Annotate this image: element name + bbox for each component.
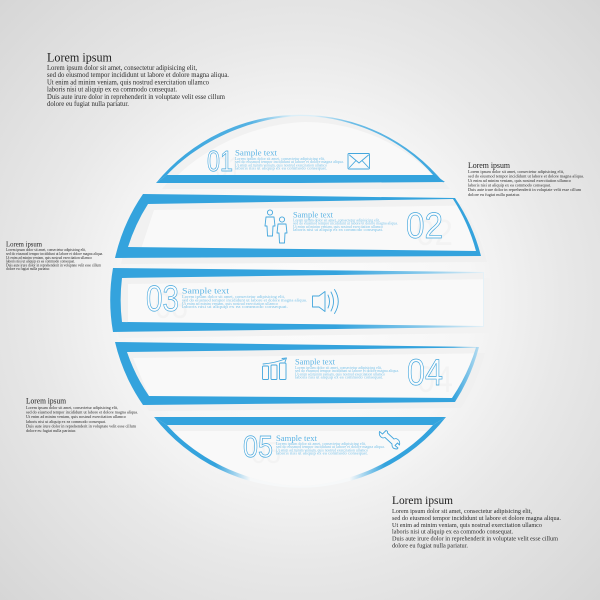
- text block: left middle: sed do eiusmod tempor incididunt ut labore et dolore magna aliqua.: [6, 252, 103, 256]
- text block: top left: [47, 50, 229, 108]
- body text 3: Ut enim ad minim veniam, quis nostrud exercitation ullamco: [182, 302, 278, 307]
- heading: sample text 4: Sample text: [295, 358, 336, 366]
- body text 5: sed do eiusmod tempor incididunt ut labore et dolore magna aliqua.: [276, 445, 385, 449]
- text block: bottom right: Lorem ipsum dolor sit amet, consectetur adipisicing elit,: [392, 508, 532, 515]
- text block: bottom right: Lorem ipsum: [392, 493, 454, 507]
- icon: envelope: [348, 154, 370, 169]
- text block: bottom right: Ut enim ad minim veniam, quis nostrud exercitation ullamco: [392, 522, 542, 529]
- body text 1: Ut enim ad minim veniam, quis nostrud exercitation ullamco: [235, 163, 327, 168]
- body text 4: Ut enim ad minim veniam, quis nostrud exercitation ullamco: [295, 372, 385, 377]
- text block: bottom right: Duis aute irure dolor in reprehenderit in voluptate velit esse cillum: [392, 536, 558, 543]
- icon: people: [265, 210, 287, 243]
- text block: bottom right: [392, 493, 561, 550]
- body text 4: Lorem ipsum dolor sit amet, consectetur adipisicing elit,: [295, 366, 382, 371]
- text block: lower left: Ut enim ad minim veniam, quis nostrud exercitation ullamco: [26, 414, 127, 420]
- text block: right top: laboris nisi ut aliquip ex ea commodo consequat.: [468, 183, 551, 188]
- heading: sample text 3: Sample text: [182, 286, 230, 296]
- text block: lower left: Lorem ipsum dolor sit amet, consectetur adipisicing elit,: [26, 405, 118, 411]
- text block: left middle: [6, 240, 103, 271]
- body text 1: Lorem ipsum dolor sit amet, consectetur adipisicing elit,: [235, 157, 325, 162]
- number 05: 05: [243, 429, 273, 464]
- text block: left middle: Lorem ipsum dolor sit amet, consectetur adipisicing elit,: [6, 248, 86, 253]
- body text 3: [182, 295, 307, 309]
- text block: right top: Duis aute irure dolor in reprehenderit in voluptate velit esse cillum: [468, 187, 581, 192]
- number 01: 01: [207, 146, 233, 178]
- text block: lower left: sed do eiusmod tempor incididunt ut labore et dolore magna aliqua.: [26, 410, 138, 415]
- body text 5: [276, 442, 385, 456]
- text block: bottom right: dolore eu fugiat nulla pariatur.: [392, 542, 468, 550]
- text block: left middle: Lorem ipsum: [6, 240, 42, 248]
- icon: wrench: [379, 430, 400, 449]
- heading: sample text 2: Sample text: [293, 210, 334, 220]
- body text 4: laboris nisi ut aliquip ex ea commodo consequat.: [295, 376, 383, 380]
- text block: left middle: laboris nisi ut aliquip ex ea commodo consequat.: [6, 260, 75, 264]
- text block: left middle: dolore eu fugiat nulla pariatur.: [6, 267, 50, 271]
- text block: right top: [468, 161, 584, 197]
- text block: lower left: [26, 396, 138, 433]
- panel: segment 4: 04: [417, 359, 453, 400]
- text block: left middle: Duis aute irure dolor in reprehenderit in voluptate velit esse cillum: [6, 263, 101, 267]
- text block: right top: Lorem ipsum dolor sit amet, consectetur adipisicing elit,: [468, 169, 564, 175]
- panel: segment 2: 02: [416, 212, 453, 253]
- number 03: 03: [146, 278, 179, 319]
- text block: right top: Ut enim ad minim veniam, quis nostrud exercitation ullamco: [468, 178, 572, 184]
- body text 1: laboris nisi ut aliquip ex ea commodo consequat.: [235, 167, 327, 171]
- body text 2: Lorem ipsum dolor sit amet, consectetur adipisicing elit,: [293, 218, 380, 224]
- panel: segment 3: 03: [155, 285, 188, 326]
- icon: bar chart: [262, 358, 286, 380]
- heading: sample text 1: Sample text: [235, 148, 278, 158]
- text block: lower left: Duis aute irure dolor in reprehenderit in voluptate velit esse cillum: [26, 423, 137, 428]
- icon: speaker: [312, 290, 338, 314]
- panel: segment 5: [154, 417, 446, 480]
- text block: top left: dolore eu fugiat nulla pariatur.: [47, 101, 129, 108]
- text block: lower left: laboris nisi ut aliquip ex ea commodo consequat.: [26, 419, 106, 424]
- body text 2: [293, 218, 398, 232]
- panel: segment 1: [156, 115, 450, 190]
- text block: bottom right: laboris nisi ut aliquip ex ea commodo consequat.: [392, 529, 513, 536]
- text block: top left: Duis aute irure dolor in reprehenderit in voluptate velit esse cillum: [47, 94, 226, 101]
- text block: right top: dolore eu fugiat nulla pariatur.: [468, 192, 520, 197]
- text block: top left: Lorem ipsum dolor sit amet, consectetur adipisicing elit,: [47, 65, 197, 72]
- text block: top left: laboris nisi ut aliquip ex ea commodo consequat.: [47, 87, 177, 94]
- body text 5: laboris nisi ut aliquip ex ea commodo consequat.: [276, 452, 368, 456]
- text block: top left: sed do eiusmod tempor incididunt ut labore et dolore magna aliqua.: [47, 72, 229, 79]
- body text 1: sed do eiusmod tempor incididunt ut labore et dolore magna aliqua.: [235, 160, 344, 164]
- text block: bottom right: sed do eiusmod tempor incididunt ut labore et dolore magna aliqua.: [392, 515, 561, 522]
- body text 1: [235, 157, 344, 171]
- panel: segment 5: 05: [251, 435, 281, 470]
- text block: lower left: Lorem ipsum: [26, 396, 67, 406]
- body text 4: sed do eiusmod tempor incididunt ut labore et dolore magna aliqua.: [295, 369, 399, 373]
- text block: top left: Lorem ipsum: [47, 50, 112, 64]
- number 04: 04: [407, 352, 443, 393]
- heading: sample text 5: Sample text: [276, 434, 318, 443]
- text block: right top: sed do eiusmod tempor incididunt ut labore et dolore magna aliqua.: [468, 173, 584, 178]
- body text 4: [295, 366, 399, 380]
- panel: segment 3: [110, 268, 484, 336]
- text block: top left: Ut enim ad minim veniam, quis nostrud exercitation ullamco: [47, 79, 210, 86]
- body text 2: sed do eiusmod tempor incididunt ut labore et dolore magna aliqua.: [293, 222, 398, 226]
- body text 2: Ut enim ad minim veniam, quis nostrud exercitation ullamco: [293, 225, 383, 230]
- panel: segment 1: 01: [215, 152, 241, 184]
- body text 3: laboris nisi ut aliquip ex ea commodo consequat.: [182, 305, 288, 309]
- panel: segment 4: [115, 342, 500, 411]
- text block: lower left: dolore eu fugiat nulla pariatur.: [26, 428, 76, 433]
- text block: right top: Lorem ipsum: [468, 161, 511, 170]
- body text 2: laboris nisi ut aliquip ex ea commodo consequat.: [293, 228, 383, 232]
- body text 3: Lorem ipsum dolor sit amet, consectetur adipisicing elit,: [182, 295, 285, 300]
- number 02: 02: [406, 205, 443, 246]
- body text 3: sed do eiusmod tempor incididunt ut labore et dolore magna aliqua.: [182, 298, 307, 302]
- body text 5: Ut enim ad minim veniam, quis nostrud exercitation ullamco: [276, 448, 368, 453]
- body text 5: Lorem ipsum dolor sit amet, consectetur adipisicing elit,: [276, 442, 366, 447]
- text block: left middle: Ut enim ad minim veniam, quis nostrud exercitation ullamco: [6, 256, 92, 261]
- panel: segment 2: [115, 194, 481, 264]
